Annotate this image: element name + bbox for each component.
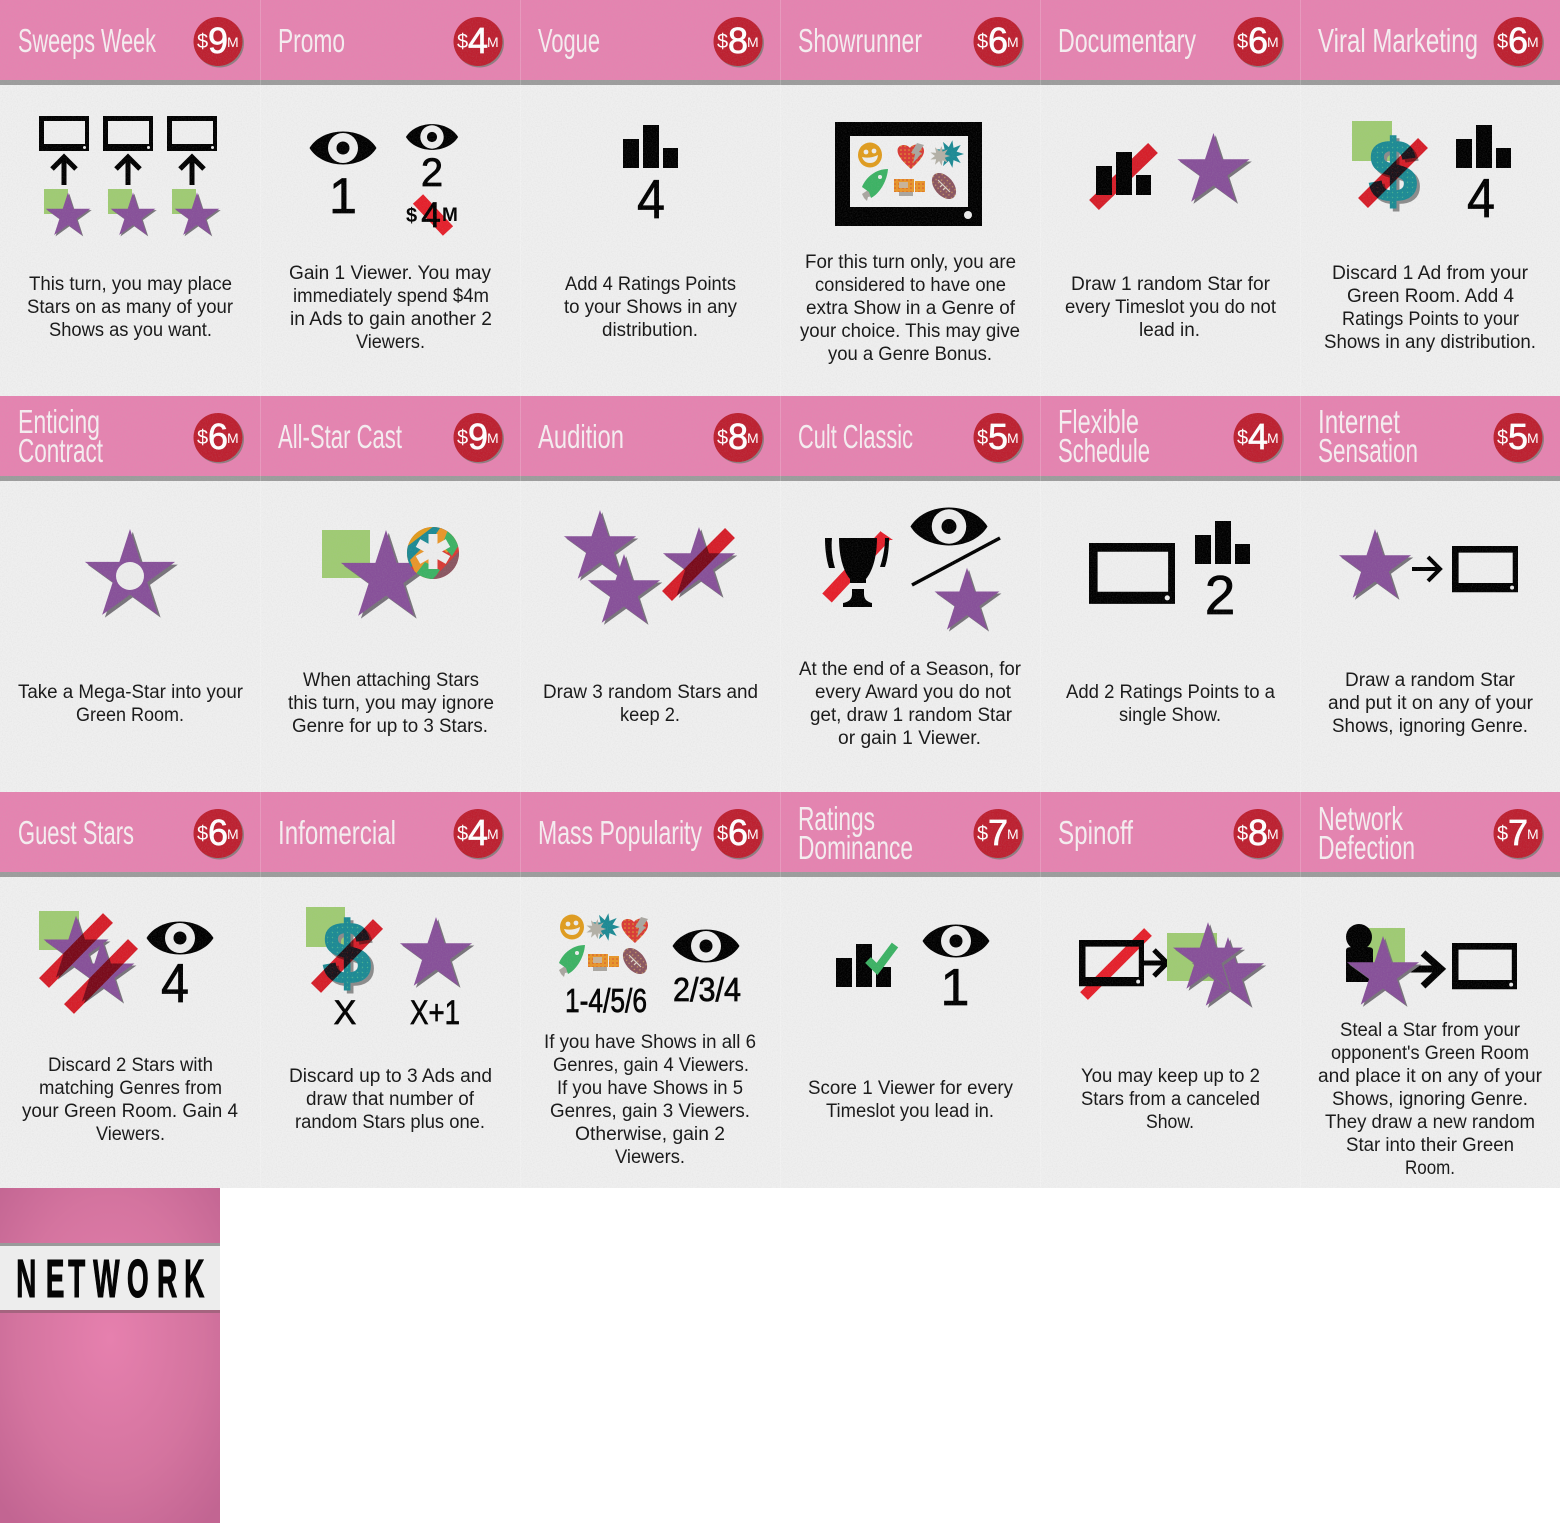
card: Guest Stars xyxy=(18,809,244,1145)
price coin $6M xyxy=(194,413,244,464)
title: All-Star Cast xyxy=(278,418,402,455)
card: Enticing Contract xyxy=(18,403,244,726)
card text: Genre for up to 3 Stars. xyxy=(292,716,488,737)
card text: Draw 3 random Stars and xyxy=(543,682,758,703)
icon: three stars, one crossed out xyxy=(564,510,737,625)
price coin $5M xyxy=(974,413,1024,464)
card text: in Ads to gain another 2 xyxy=(290,309,492,330)
price coin $4M: $ xyxy=(1237,427,1248,449)
card text: Shows as you want. xyxy=(49,320,212,341)
icon: eye 2/3/4 xyxy=(672,930,741,1008)
price coin $6M: 6 xyxy=(1248,20,1268,61)
icon: crossed out ad X: $ xyxy=(323,905,371,1002)
paper grain texture xyxy=(0,0,1560,1188)
price coin $4M: 4 xyxy=(1248,416,1268,457)
price coin $8M xyxy=(1234,809,1284,860)
card: Sweeps Week xyxy=(18,17,244,341)
price coin $8M: M xyxy=(1267,826,1279,842)
icon: eye 2/3/4: 2/3/4 xyxy=(673,971,741,1008)
price coin $6M: M xyxy=(227,826,239,842)
title: Showrunner xyxy=(798,22,922,59)
title xyxy=(1318,403,1418,469)
card text: Shows in any distribution. xyxy=(1324,332,1536,353)
icon: six genres 1-4/5/6 xyxy=(559,913,652,1019)
card text: This turn, you may place xyxy=(29,274,232,295)
title: Sweeps Week xyxy=(18,22,156,59)
price coin $7M: 7 xyxy=(988,812,1008,853)
card text xyxy=(1081,1066,1260,1133)
icon: crossed out trophy xyxy=(825,531,893,607)
card text: distribution. xyxy=(602,320,698,341)
card text: Take a Mega-Star into your xyxy=(18,682,244,703)
card text: Otherwise, gain 2 xyxy=(575,1124,725,1145)
card text xyxy=(564,274,737,341)
card text: Discard 1 Ad from your xyxy=(1332,263,1529,284)
price coin $7M: $ xyxy=(1497,823,1508,845)
icon: crossed out ad on green room xyxy=(1352,121,1423,223)
icon: TV with six genres xyxy=(835,122,982,226)
price coin $6M: M xyxy=(747,826,759,842)
icon: star X+1: X+1 xyxy=(410,994,460,1032)
price coin $8M: $ xyxy=(717,31,728,53)
icon: six genres 1-4/5/6: 1-4/5/6 xyxy=(565,982,647,1019)
price coin $8M xyxy=(714,17,764,68)
card text xyxy=(1324,263,1536,353)
price coin $4M: 4 xyxy=(468,812,488,853)
card: Cult Classic xyxy=(798,413,1024,749)
price coin $9M: $ xyxy=(197,31,208,53)
card text: Stars from a canceled xyxy=(1081,1089,1260,1110)
title: Sensation xyxy=(1318,432,1418,469)
price coin $9M: $ xyxy=(457,427,468,449)
card text: Add 4 Ratings Points xyxy=(565,274,736,295)
price coin $6M: $ xyxy=(977,31,988,53)
card text: lead in. xyxy=(1139,320,1200,341)
card text: At the end of a Season, for xyxy=(799,659,1022,680)
card text: Show. xyxy=(1146,1112,1194,1133)
price coin $4M xyxy=(454,17,504,68)
price coin $6M: $ xyxy=(197,823,208,845)
card text: Gain 1 Viewer. You may xyxy=(289,263,491,284)
card text: Green Room. Add 4 xyxy=(1347,286,1514,307)
price coin $5M: M xyxy=(1007,430,1019,446)
icon: ratings bars 4 xyxy=(1456,125,1511,229)
price coin $6M xyxy=(194,809,244,860)
price coin $7M: M xyxy=(1007,826,1019,842)
title: Infomercial xyxy=(278,814,396,851)
icon: eye gain 2 with crossed out cost: 4 xyxy=(421,196,441,235)
title: Ratings xyxy=(798,800,875,837)
card text: matching Genres from xyxy=(39,1078,222,1099)
price coin $9M: 9 xyxy=(468,416,488,457)
price coin $7M: 7 xyxy=(1508,812,1528,853)
card: Flexible Schedule xyxy=(1058,403,1284,726)
card text xyxy=(808,1078,1013,1122)
card: Showrunner xyxy=(798,17,1024,365)
card: Viral Marketing xyxy=(1318,17,1544,353)
card text: Timeslot you lead in. xyxy=(826,1101,994,1122)
price coin $7M xyxy=(974,809,1024,860)
card text: considered to have one xyxy=(815,275,1006,296)
price coin $8M: M xyxy=(747,430,759,446)
card text: keep 2. xyxy=(620,705,680,726)
card text: Ratings Points to your xyxy=(1342,309,1520,330)
icon: eye gain 2 with crossed out cost: M xyxy=(442,205,458,226)
card text: opponent's Green Room xyxy=(1331,1043,1529,1064)
price coin $9M: M xyxy=(227,34,239,50)
card text: every Timeslot you do not xyxy=(1065,297,1277,318)
price coin $4M xyxy=(1234,413,1284,464)
card text xyxy=(27,274,234,341)
card text: Viewers. xyxy=(356,332,425,353)
icon: crossed out ad X xyxy=(306,905,378,1032)
icon: eye gain 2 with crossed out cost: $ xyxy=(406,205,417,227)
price coin $5M: 5 xyxy=(988,416,1008,457)
price coin $4M: M xyxy=(487,826,499,842)
card text: or gain 1 Viewer. xyxy=(838,728,981,749)
card: Mass Popularity xyxy=(538,809,764,1168)
card: Documentary xyxy=(1058,17,1284,341)
price coin $5M: $ xyxy=(977,427,988,449)
price coin $6M: M xyxy=(227,430,239,446)
price coin $4M: M xyxy=(487,34,499,50)
price coin $6M: 6 xyxy=(728,812,748,853)
title: Audition xyxy=(538,418,624,455)
icon: eye 4: 4 xyxy=(161,952,189,1014)
title: Documentary xyxy=(1058,22,1196,59)
title xyxy=(18,403,103,469)
card: Audition xyxy=(538,413,764,726)
card: Spinoff xyxy=(1058,809,1284,1133)
price coin $8M: M xyxy=(747,34,759,50)
price coin $4M: 4 xyxy=(468,20,488,61)
card text: and place it on any of your xyxy=(1318,1066,1543,1087)
card text: Stars on as many of your xyxy=(27,297,234,318)
icon: star X+1 xyxy=(400,917,474,1032)
price coin $6M: $ xyxy=(1497,31,1508,53)
card text: You may keep up to 2 xyxy=(1081,1066,1260,1087)
icon: star with green room and wild genre xyxy=(322,527,459,618)
price coin $6M: $ xyxy=(1237,31,1248,53)
title: Mass Popularity xyxy=(538,814,702,851)
card text: Genres, gain 4 Viewers. xyxy=(553,1055,749,1076)
card text: Shows, ignoring Genre. xyxy=(1332,716,1528,737)
icon: ratings bars 4 xyxy=(623,125,678,230)
price coin $6M: 6 xyxy=(1508,20,1528,61)
card text: draw that number of xyxy=(306,1089,475,1110)
card text xyxy=(289,1066,492,1133)
card text: Green Room. xyxy=(76,705,184,726)
price coin $9M: M xyxy=(487,430,499,446)
card text xyxy=(1328,670,1534,737)
card text: your Green Room. Gain 4 xyxy=(22,1101,238,1122)
price coin $4M xyxy=(454,809,504,860)
card back: NETWORK xyxy=(0,1188,220,1523)
icon: crossed out ad X: $ xyxy=(326,908,374,1005)
card text: Steal a Star from your xyxy=(1340,1020,1521,1041)
title: Dominance xyxy=(798,829,913,866)
price coin $8M: 8 xyxy=(1248,812,1268,853)
icon: crossed out ad X: X xyxy=(334,994,356,1032)
card: Promo xyxy=(278,17,504,353)
card text xyxy=(1065,274,1277,341)
icon: eye or star xyxy=(910,508,1001,632)
title: Defection xyxy=(1318,829,1415,866)
card text: and put it on any of your xyxy=(1328,693,1534,714)
title xyxy=(1318,800,1415,866)
title: Guest Stars xyxy=(18,814,134,851)
title xyxy=(798,800,913,866)
icon: eye 4 xyxy=(146,922,214,1014)
card: Network Defection xyxy=(1318,800,1544,1179)
title: Cult Classic xyxy=(798,418,913,455)
price coin $6M: $ xyxy=(717,823,728,845)
icon: ratings bars 4: 4 xyxy=(637,168,665,230)
price coin $6M: 6 xyxy=(208,812,228,853)
card text: Viewers. xyxy=(96,1124,165,1145)
price coin $8M: $ xyxy=(1237,823,1248,845)
card: All-Star Cast xyxy=(278,413,504,737)
price coin $5M: 5 xyxy=(1508,416,1528,457)
icon: mega star xyxy=(85,529,178,618)
price coin $6M xyxy=(974,17,1024,68)
price coin $7M xyxy=(1494,809,1544,860)
price coin $6M: $ xyxy=(197,427,208,449)
price coin $5M: $ xyxy=(1497,427,1508,449)
price coin $9M xyxy=(454,413,504,464)
title: Viral Marketing xyxy=(1318,22,1478,59)
title: Promo xyxy=(278,22,345,59)
card text: this turn, you may ignore xyxy=(288,693,494,714)
icon: two crossed out stars in green room xyxy=(39,911,136,1009)
card text xyxy=(800,252,1020,365)
icon: ratings bars 2 xyxy=(1195,521,1250,626)
title xyxy=(1058,403,1150,469)
card text xyxy=(1318,1020,1543,1179)
card: Infomercial xyxy=(278,809,504,1133)
price coin $6M: M xyxy=(1527,34,1539,50)
price coin $6M: 6 xyxy=(988,20,1008,61)
icon: crossed out ratings bars xyxy=(1094,148,1153,205)
icon: eye gain 2 with crossed out cost: 2 xyxy=(421,151,443,195)
price coin $9M: 9 xyxy=(208,20,228,61)
card: Vogue xyxy=(538,17,764,341)
price coin $8M: 8 xyxy=(728,20,748,61)
title: Flexible xyxy=(1058,403,1139,440)
card text: Score 1 Viewer for every xyxy=(808,1078,1013,1099)
icon: canceled show to two stars xyxy=(1079,922,1266,1008)
icon: steal star from opponent to show xyxy=(1346,924,1517,1007)
wordmark: NETWORK xyxy=(16,1249,204,1310)
card text: For this turn only, you are xyxy=(805,252,1016,273)
card text xyxy=(544,1032,756,1168)
card text: Discard 2 Stars with xyxy=(48,1055,213,1076)
card text: extra Show in a Genre of xyxy=(806,298,1016,319)
card text: you a Genre Bonus. xyxy=(828,344,992,365)
price coin $6M: M xyxy=(1267,34,1279,50)
card text xyxy=(799,659,1022,749)
card text: Draw 1 random Star for xyxy=(1071,274,1271,295)
price coin $7M: M xyxy=(1527,826,1539,842)
card text: Discard up to 3 Ads and xyxy=(289,1066,492,1087)
price coin $8M: 8 xyxy=(728,416,748,457)
title: Internet xyxy=(1318,403,1400,440)
card text: They draw a new random xyxy=(1325,1112,1535,1133)
icon: star xyxy=(1177,133,1252,204)
icon: three shows with arrows and stars xyxy=(39,116,221,236)
card text: Add 2 Ratings Points to a xyxy=(1066,682,1275,703)
icon: eye 1: 1 xyxy=(941,959,969,1017)
card text: Draw a random Star xyxy=(1345,670,1516,691)
title: Spinoff xyxy=(1058,814,1134,851)
price coin $8M: $ xyxy=(717,427,728,449)
icon: eye gain 1: 1 xyxy=(329,168,357,224)
title: Contract xyxy=(18,432,103,469)
card text xyxy=(543,682,758,726)
title: Schedule xyxy=(1058,432,1150,469)
card text xyxy=(288,670,494,737)
icon: ratings bars with check xyxy=(836,944,895,987)
price coin $6M xyxy=(1234,17,1284,68)
title: Enticing xyxy=(18,403,100,440)
card text: every Award you do not xyxy=(815,682,1012,703)
card text: Genres, gain 3 Viewers. xyxy=(550,1101,750,1122)
background: pink headers and paper bodies xyxy=(0,0,1560,1188)
card text: Shows, ignoring Genre. xyxy=(1332,1089,1528,1110)
card text: When attaching Stars xyxy=(303,670,479,691)
card text: single Show. xyxy=(1119,705,1221,726)
card text xyxy=(22,1055,238,1145)
title: Vogue xyxy=(538,22,600,59)
card text: If you have Shows in all 6 xyxy=(544,1032,756,1053)
icon: eye gain 2 with crossed out cost xyxy=(406,124,458,235)
price coin $6M xyxy=(1494,17,1544,68)
card text: random Stars plus one. xyxy=(295,1112,485,1133)
card text: get, draw 1 random Star xyxy=(810,705,1013,726)
card text: Star into their Green xyxy=(1346,1135,1514,1156)
card text: Room. xyxy=(1405,1158,1455,1179)
card text xyxy=(18,682,244,726)
card: Internet Sensation xyxy=(1318,403,1544,737)
icon: eye gain 1 xyxy=(310,132,376,224)
card text: immediately spend $4m xyxy=(293,286,489,307)
card text xyxy=(1066,682,1275,726)
price coin $5M: M xyxy=(1527,430,1539,446)
icon: TV xyxy=(1089,543,1175,604)
card text: Viewers. xyxy=(615,1147,685,1168)
card text: If you have Shows in 5 xyxy=(557,1078,743,1099)
card text xyxy=(289,263,492,353)
icon: ratings bars 4: 4 xyxy=(1467,167,1495,229)
title: Network xyxy=(1318,800,1403,837)
icon: crossed out ad on green room: $ xyxy=(1369,123,1417,220)
card text: your choice. This may give xyxy=(800,321,1020,342)
icon: star to show xyxy=(1339,529,1518,600)
icon: eye 1 xyxy=(922,924,990,1017)
price coin $7M: $ xyxy=(977,823,988,845)
price coin $5M xyxy=(1494,413,1544,464)
price coin $6M: 6 xyxy=(208,416,228,457)
card text: to your Shows in any xyxy=(564,297,737,318)
price coin $6M xyxy=(714,809,764,860)
price coin $8M xyxy=(714,413,764,464)
price coin $6M: M xyxy=(1007,34,1019,50)
price coin $4M: M xyxy=(1267,430,1279,446)
icon: crossed out ad on green room: $ xyxy=(1372,126,1420,223)
icon: ratings bars 2: 2 xyxy=(1205,564,1235,626)
price coin $4M: $ xyxy=(457,823,468,845)
price coin $9M xyxy=(194,17,244,68)
price coin $4M: $ xyxy=(457,31,468,53)
card: Ratings Dominance xyxy=(798,800,1024,1122)
